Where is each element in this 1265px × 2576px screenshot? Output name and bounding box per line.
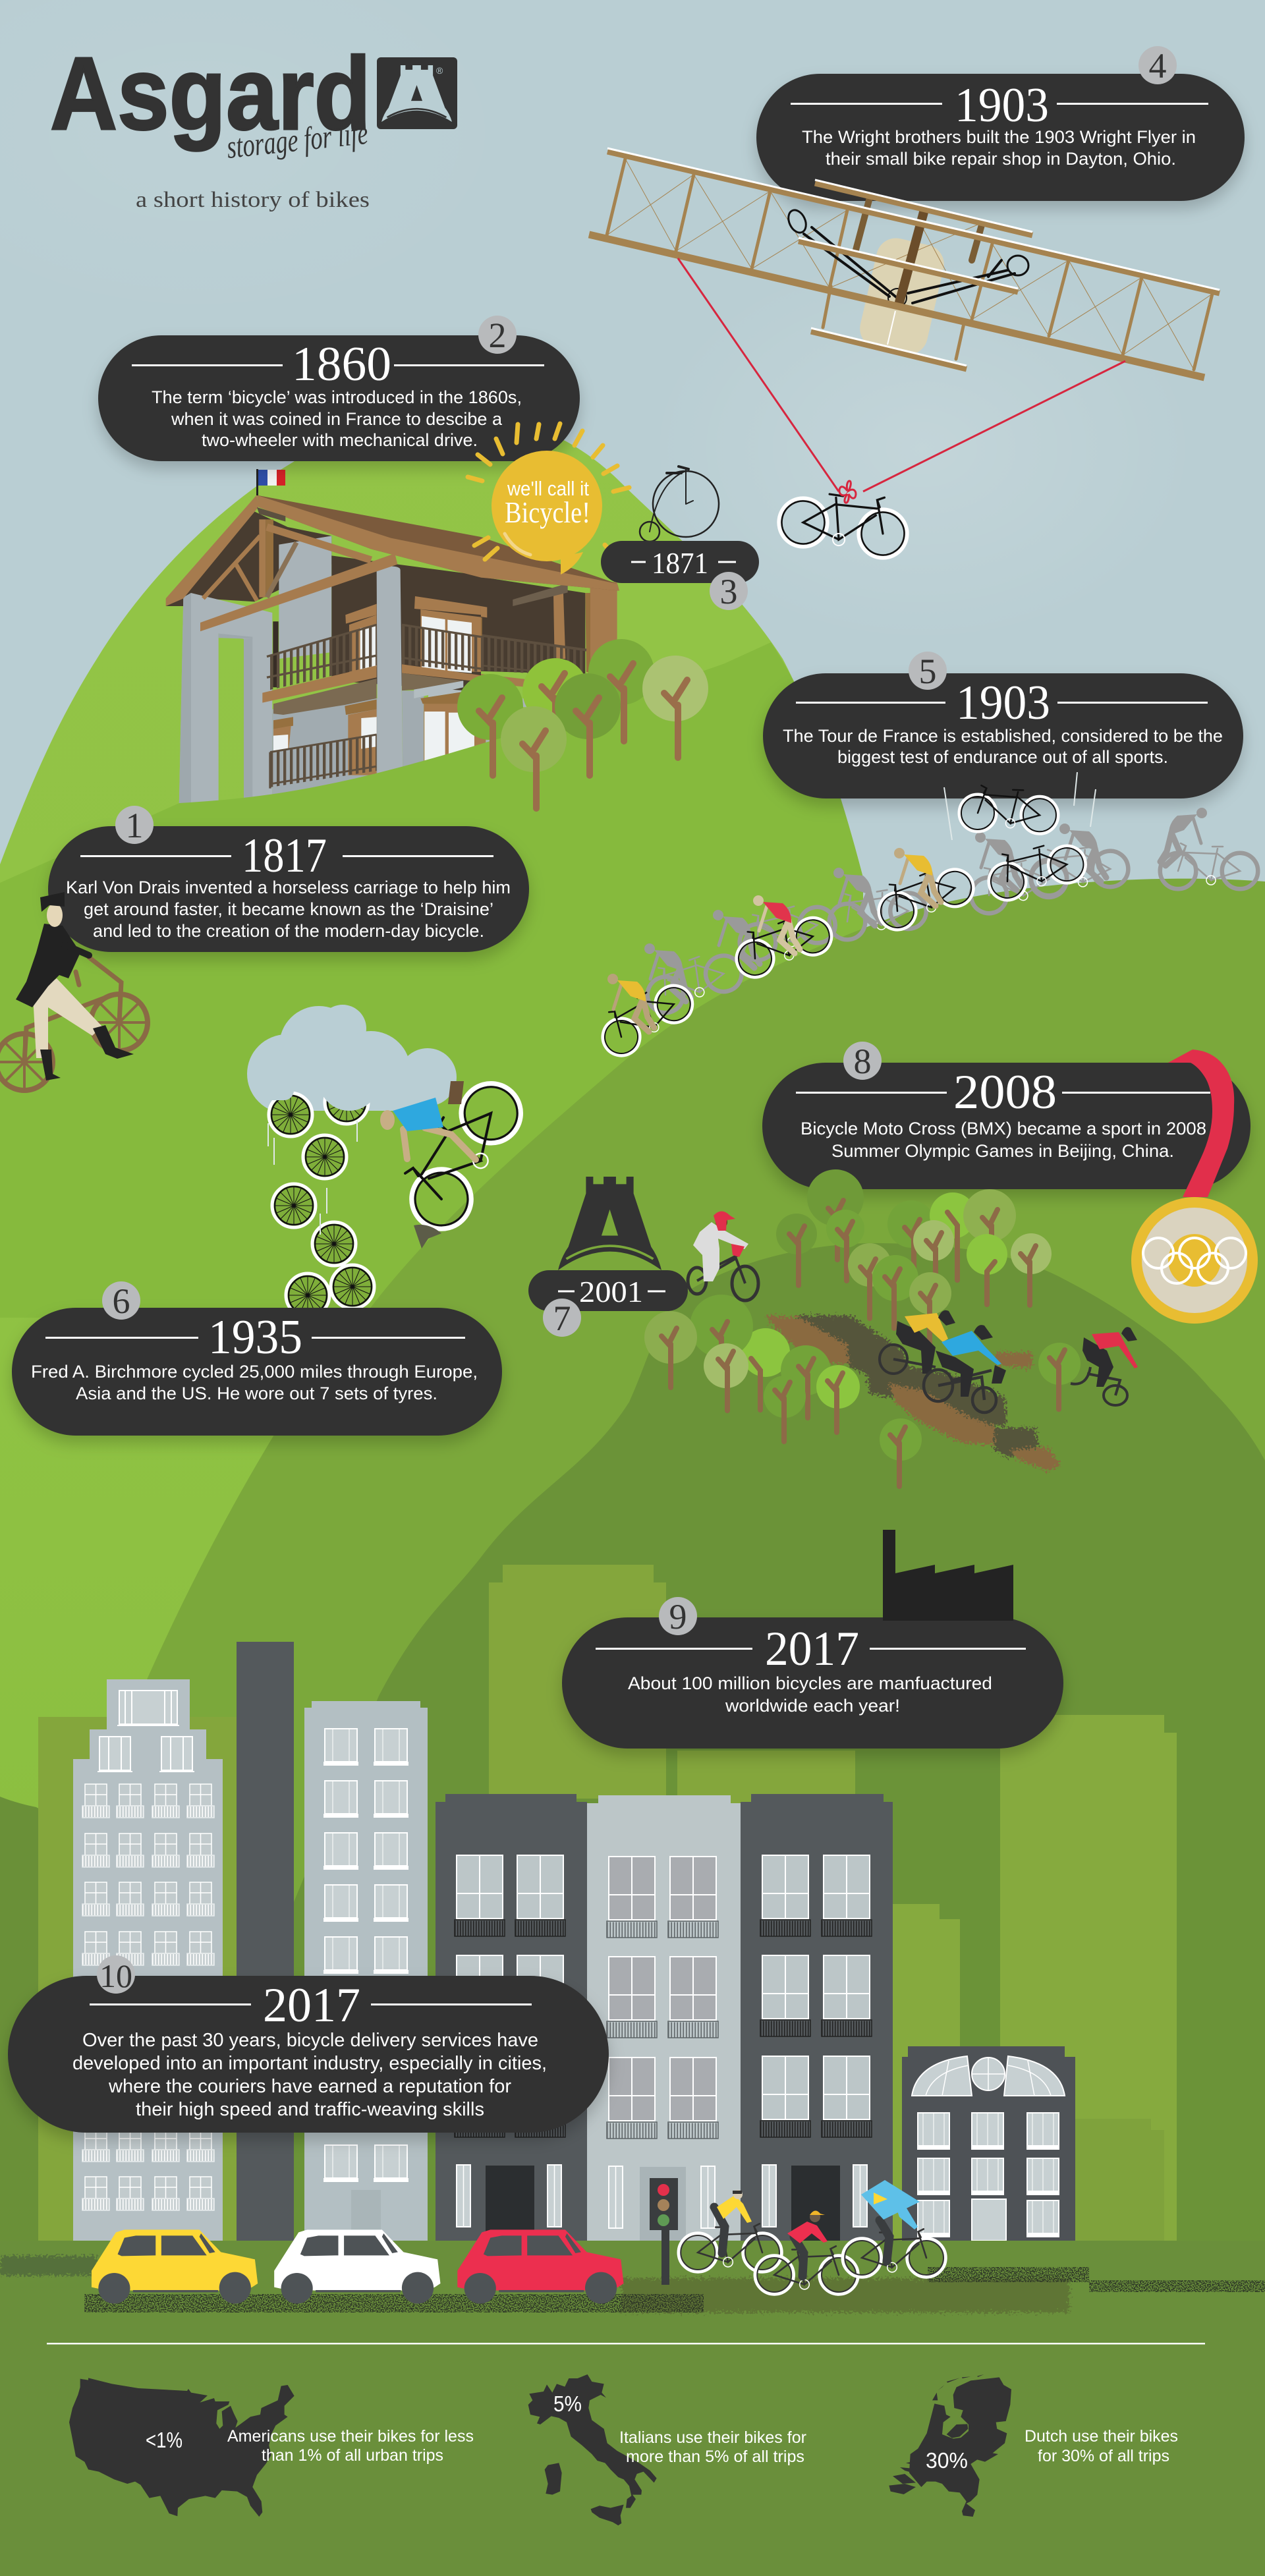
badge 1 <box>115 806 154 845</box>
BMX rider: yellow <box>880 1310 955 1374</box>
pill 5: 1903 Tour de France: biggest test of endurance out of all sports. <box>837 747 1168 767</box>
bicycle under flyer <box>776 484 912 561</box>
pill 6: 1935 <box>12 1308 502 1436</box>
subtitle: a short history of bikes <box>136 188 370 212</box>
rider: yellow jersey front <box>870 848 979 935</box>
wings <box>589 148 1220 378</box>
pill 10: 2017 couriers: where the couriers have earned a reputation for <box>108 2076 511 2097</box>
icon: logo tower: ® <box>436 65 443 76</box>
hill: fold in front of house <box>0 642 863 1318</box>
badge 6 <box>102 1281 140 1321</box>
building: small dark with arched window <box>902 2046 1075 2241</box>
map: USA <box>69 2378 295 2517</box>
pill 4: 1903 Wright Flyer: 1903 <box>955 78 1049 132</box>
rain <box>268 1121 357 1235</box>
Olympic medal <box>1131 1050 1258 1324</box>
pill 1: 1817 <box>48 826 529 952</box>
pill 8: 2008: 2008 <box>953 1065 1057 1119</box>
badge 7 <box>543 1299 581 1338</box>
hill: mid green <box>92 879 1265 2576</box>
badge 6: 6 <box>112 1281 130 1321</box>
pill 4: 1903 Wright Flyer <box>756 74 1245 201</box>
pill 7: 2001 <box>528 1270 688 1311</box>
hill: lower left <box>0 1797 277 2576</box>
pill 7: 2001: 2001 <box>579 1275 643 1308</box>
building: gabled grey <box>73 1679 223 2241</box>
pill 5: 1903 Tour de France <box>763 673 1243 798</box>
pill 4: 1903 Wright Flyer: The Wright brothers built the 1903 Wright Flyer in <box>802 127 1196 147</box>
pill 6: 1935: Fred A. Birchmore cycled 25,000 miles through Europe, <box>31 1362 478 1382</box>
trees by the house <box>457 639 708 808</box>
pill 5: 1903 Tour de France: 1903 <box>956 676 1050 730</box>
illustration: Wright Flyer <box>589 148 1220 378</box>
pill 10: 2017 couriers <box>8 1976 609 2133</box>
cyclist: red courier with cap <box>755 2210 858 2294</box>
road smudges <box>0 2256 1265 2312</box>
stat: Italy: 5% <box>553 2392 582 2416</box>
hill: dark green with BMX track <box>277 1243 1265 2576</box>
flyer body <box>856 234 948 359</box>
pill 6: 1935: Asia and the US. He wore out 7 sets of tyres. <box>76 1384 437 1403</box>
badge 9: 9 <box>669 1597 687 1637</box>
ground strip <box>0 2241 1265 2576</box>
badge 3: 3 <box>719 572 738 611</box>
logo: Asgard: Asgard <box>50 36 371 152</box>
divider <box>47 2343 1205 2344</box>
badge 8 <box>843 1042 882 1081</box>
pill 2: 1860 <box>98 335 580 461</box>
traffic light <box>650 2178 678 2285</box>
tow lines <box>678 258 1125 491</box>
building: dark tower <box>237 1642 294 2241</box>
badge 9 <box>659 1597 697 1637</box>
peloton: grey riders <box>638 808 1258 1019</box>
stat: Netherlands: for 30% of all trips <box>1038 2447 1169 2465</box>
hill: main bright green <box>0 415 863 2576</box>
BMX rider: red <box>1071 1327 1138 1405</box>
pill 8: 2008 <box>762 1063 1251 1189</box>
BMX forest <box>644 1169 1081 1486</box>
stat: USA: than 1% of all urban trips <box>262 2446 443 2465</box>
icon: logo tower <box>377 57 457 129</box>
badge 10: 10 <box>99 1957 132 1994</box>
BMX dirt track <box>764 1316 1061 1471</box>
building: tall grey <box>304 1701 428 2241</box>
peloton: black bicycle <box>982 833 1090 905</box>
pill 9: 2017 production with factory: worldwide each year! <box>725 1696 900 1716</box>
building: terrace row <box>436 1794 893 2241</box>
pill 1: 1817: 1817 <box>242 829 327 883</box>
house <box>166 495 619 808</box>
pill 10: 2017 couriers: 2017 <box>263 1978 360 2032</box>
penny farthing <box>640 466 719 542</box>
peloton: airborne bicycle <box>959 785 1059 834</box>
pill 10: 2017 couriers: Over the past 30 years, bicycle delivery services have <box>82 2030 538 2051</box>
badge 5: 5 <box>918 652 937 691</box>
badge 2: 2 <box>489 316 506 355</box>
badge 7: 7 <box>553 1299 571 1338</box>
badge 8: 8 <box>854 1042 871 1081</box>
badge 5 <box>909 652 947 691</box>
badge 4: 4 <box>1149 46 1166 86</box>
background buildings <box>38 1565 1177 2244</box>
stat: USA <box>69 2378 474 2517</box>
stat: USA: <1% <box>146 2428 183 2452</box>
pill 9: 2017 production with factory: 2017 <box>765 1622 859 1676</box>
pill 1: 1817: get around faster, it became known as the ‘Draisine’ <box>84 899 493 919</box>
pill 1: 1817: Karl Von Drais invented a horseless carriage to help him <box>66 878 511 897</box>
rider: crash with 1935 cyclist <box>380 1065 531 1248</box>
flag: France <box>256 469 285 495</box>
stat: Italy: more than 5% of all trips <box>626 2448 804 2466</box>
speed lines <box>944 772 1096 840</box>
cloud foreground <box>254 1050 380 1111</box>
badge 2 <box>478 316 517 355</box>
badge 1: 1 <box>125 806 144 845</box>
cyclist: pizza courier <box>843 2180 945 2277</box>
speech bubble: we'll call it Bicycle! <box>468 424 629 574</box>
pill 10: 2017 couriers: developed into an important industry, especially in cities, <box>72 2053 547 2074</box>
stat: Italy: Italians use their bikes for <box>619 2428 806 2447</box>
stat: Netherlands: Dutch use their bikes <box>1025 2427 1178 2446</box>
pill 3: 1871: 1871 <box>652 546 708 580</box>
badge 4 <box>1138 46 1177 86</box>
pill 2: 1860: 1860 <box>292 337 391 391</box>
stat: Italy <box>528 2374 806 2525</box>
stat: Netherlands: 30% <box>926 2448 968 2473</box>
speech bubble: we'll call it Bicycle!: Bicycle! <box>505 496 590 529</box>
pill 2: 1860: two-wheeler with mechanical drive. <box>202 430 478 450</box>
pill 4: 1903 Wright Flyer: their small bike repair shop in Dayton, Ohio. <box>826 149 1176 169</box>
logo: Asgard: storage for life <box>225 114 370 165</box>
icon: Asgard tower <box>558 1177 661 1270</box>
pill 6: 1935: 1935 <box>208 1310 302 1364</box>
pill 3: 1871 <box>601 541 759 583</box>
speech bubble: we'll call it Bicycle!: we'll call it <box>507 477 589 500</box>
stat: Netherlands <box>889 2374 1178 2517</box>
cloud <box>247 1005 457 1113</box>
pill 8: 2008: Summer Olympic Games in Beijing, China. <box>831 1141 1174 1161</box>
illustration: Karl Von Drais on draisine <box>0 892 148 1090</box>
pill 8: 2008: Bicycle Moto Cross (BMX) became a sport in 2008 <box>801 1119 1206 1138</box>
rider on flyer <box>785 208 1028 307</box>
pill 9: 2017 production with factory: About 100 million bicycles are manfuactured <box>628 1673 992 1693</box>
map: Netherlands <box>889 2374 1011 2517</box>
BMX rider: white with red helmet <box>688 1211 758 1301</box>
pill 2: 1860: when it was coined in France to descibe a <box>171 409 503 429</box>
rider: yellow jersey rear <box>591 971 699 1063</box>
falling wheels <box>269 1080 374 1317</box>
stat: USA: Americans use their bikes for less <box>227 2427 474 2446</box>
cyclist: yellow courier <box>679 2190 781 2272</box>
map: Italy <box>528 2374 657 2525</box>
ribbon bow <box>839 481 856 503</box>
badge 3 <box>710 572 748 611</box>
BMX rider: blue <box>924 1325 1006 1413</box>
pill 10: 2017 couriers: their high speed and traffic-weaving skills <box>136 2099 484 2120</box>
pill 2: 1860: The term ‘bicycle’ was introduced in the 1860s, <box>152 387 522 407</box>
icon: factory <box>883 1530 1013 1621</box>
cars: yellow, white, red <box>92 2229 624 2304</box>
pill 1: 1817: and led to the creation of the modern-day bicycle. <box>93 921 484 941</box>
pill 5: 1903 Tour de France: The Tour de France is established, considered to be the <box>783 726 1223 746</box>
pill 9: 2017 production with factory <box>562 1530 1063 1749</box>
rider: red jersey <box>728 895 837 982</box>
